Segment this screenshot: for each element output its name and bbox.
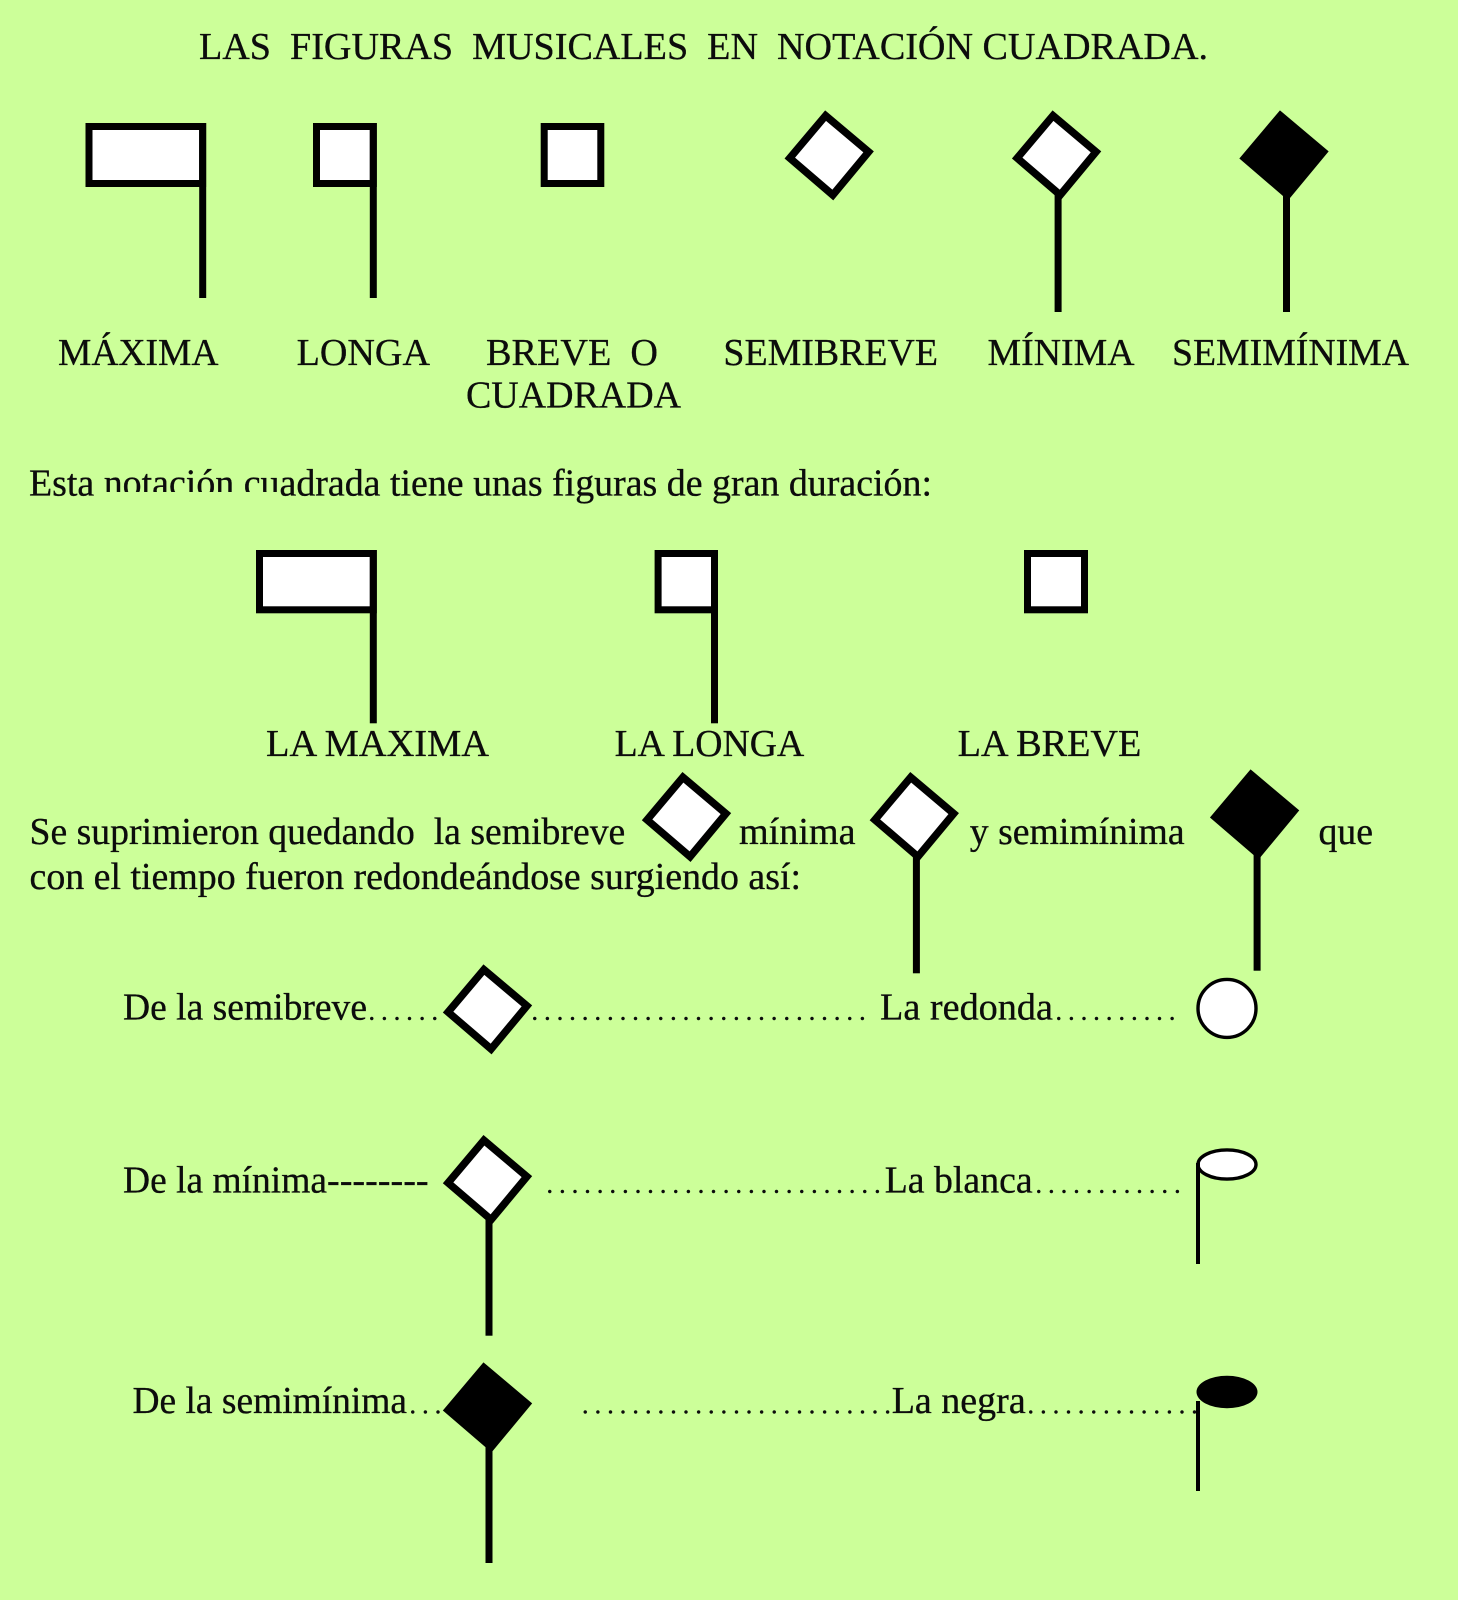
leader dots: .............. bbox=[1027, 1387, 1203, 1420]
leader dots: ...... bbox=[368, 994, 444, 1027]
row: semibreve to redonda bbox=[123, 970, 1256, 1049]
icon: la breve bbox=[1028, 554, 1084, 610]
label: semimínima: SEMIMÍNIMA bbox=[1172, 332, 1410, 374]
icon: semibreve bbox=[790, 116, 869, 195]
text: mínima: mínima bbox=[739, 811, 856, 853]
label: longa: LONGA bbox=[297, 332, 431, 374]
leader dashes: -------- bbox=[327, 1160, 429, 1202]
label: la máxima: LA MAXIMA bbox=[266, 723, 490, 765]
text: y semimínima: y semimínima bbox=[970, 811, 1185, 853]
row: mínima to blanca bbox=[123, 1140, 1256, 1336]
icon: inline mínima bbox=[875, 777, 954, 973]
icon: breve bbox=[544, 126, 601, 184]
label: la breve: LA BREVE bbox=[958, 723, 1141, 765]
text: con el tiempo: con el tiempo fueron redondeándose surgiendo así: bbox=[30, 856, 801, 898]
text: la negra: La negra bbox=[892, 1380, 1026, 1422]
leader dots: .......... bbox=[1055, 994, 1181, 1027]
label: breve o: BREVE O bbox=[486, 332, 658, 374]
label: mínima: MÍNIMA bbox=[988, 332, 1135, 374]
leader dots: ... bbox=[409, 1387, 447, 1420]
icon: la longa bbox=[658, 550, 718, 723]
label: la longa: LA LONGA bbox=[615, 723, 805, 765]
leader dots: ............ bbox=[1035, 1167, 1186, 1200]
label: semibreve: SEMIBREVE bbox=[723, 332, 938, 374]
text: de la semimínima: De la semimínima bbox=[132, 1380, 407, 1422]
icon: inline semibreve bbox=[647, 777, 726, 857]
label: cuadrada: CUADRADA bbox=[466, 374, 682, 416]
text: se suprimieron: Se suprimieron quedando la semibreve bbox=[30, 811, 625, 853]
icon: la máxima bbox=[260, 550, 377, 723]
icon: negra bbox=[1196, 1376, 1258, 1491]
text: de la semibreve: De la semibreve bbox=[123, 986, 367, 1028]
icon: mínima bbox=[448, 1140, 527, 1336]
icon: semibreve bbox=[448, 970, 527, 1049]
icon: mínima bbox=[1017, 116, 1096, 312]
text: intro sentence: Esta notación cuadrada tiene unas figuras de gran duración: bbox=[29, 463, 932, 505]
text: de la mínima: De la mínima bbox=[123, 1160, 327, 1202]
leader dots: ........................... bbox=[531, 994, 871, 1027]
icon: redonda bbox=[1198, 979, 1256, 1037]
text: la blanca: La blanca bbox=[885, 1160, 1033, 1202]
leader dots: ......................... bbox=[582, 1387, 896, 1420]
icon: máxima bbox=[89, 123, 206, 298]
icon: inline semimínima bbox=[1215, 775, 1294, 971]
title: LAS FIGURAS MUSICALES EN NOTACIÓN CUADRADA. bbox=[199, 26, 1208, 68]
row: semimínima to negra bbox=[132, 1368, 1258, 1563]
icon: blanca bbox=[1196, 1150, 1256, 1264]
leader dots: ........................... bbox=[546, 1167, 886, 1200]
text: la redonda: La redonda bbox=[880, 986, 1053, 1028]
icon: semimínima bbox=[1245, 116, 1323, 312]
label: máxima: MÁXIMA bbox=[58, 332, 219, 374]
text: que: que bbox=[1318, 811, 1373, 853]
icon: longa bbox=[316, 123, 377, 298]
icon: semimínima bbox=[448, 1368, 527, 1563]
